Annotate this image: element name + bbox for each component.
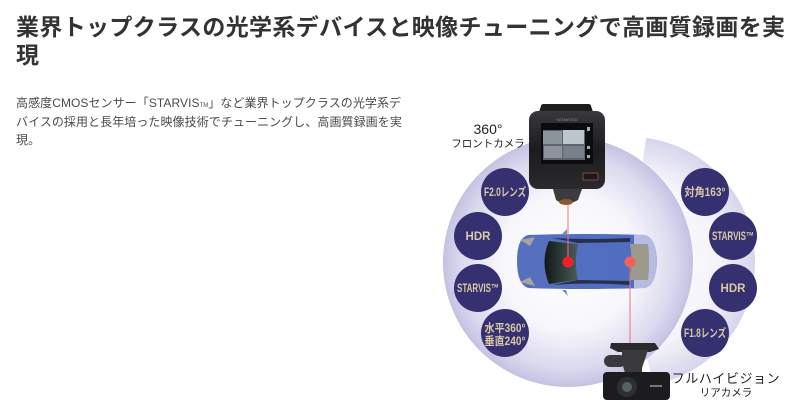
front camera label: 360°: [474, 121, 502, 137]
front camera: [529, 104, 605, 205]
front camera: KENWOOD: [556, 117, 578, 122]
feature bubbles: 対角163°: [684, 185, 726, 199]
title: 業界トップクラスの光学系デバイスと映像チューニングで高画質録画を実現: [16, 14, 785, 68]
feature bubbles: [454, 168, 757, 357]
car: [517, 229, 657, 296]
feature bubbles: STARVIS™: [712, 231, 754, 243]
feature bubbles: STARVIS™: [457, 283, 499, 295]
front camera label: [451, 121, 525, 150]
rear camera label: リアカメラ: [700, 387, 752, 399]
front camera label: フロントカメラ: [451, 138, 525, 150]
rear camera label: フルハイビジョン: [672, 371, 780, 386]
rear camera coverage: [643, 138, 755, 380]
feature bubbles: 水平360°: [484, 321, 526, 335]
rear camera label: [672, 371, 780, 399]
diagram: camera coverage: [443, 104, 779, 400]
feature bubbles: HDR: [466, 231, 491, 243]
feature bubbles: F1.8レンズ: [684, 326, 726, 340]
feature bubbles: F2.0レンズ: [484, 185, 526, 199]
front camera coverage: [443, 137, 693, 387]
body text: 高感度CMOSセンサー「STARVISTM」など業界トップクラスの光学系デバイスの採用と長年培った映像技術でチューニングし、高画質録画を実現。: [16, 96, 402, 147]
feature bubbles: 垂直240°: [484, 334, 526, 348]
rear camera: [603, 343, 670, 400]
red sensor dots: [562, 256, 636, 268]
laser lines: [568, 203, 630, 345]
feature bubbles: HDR: [721, 283, 746, 295]
